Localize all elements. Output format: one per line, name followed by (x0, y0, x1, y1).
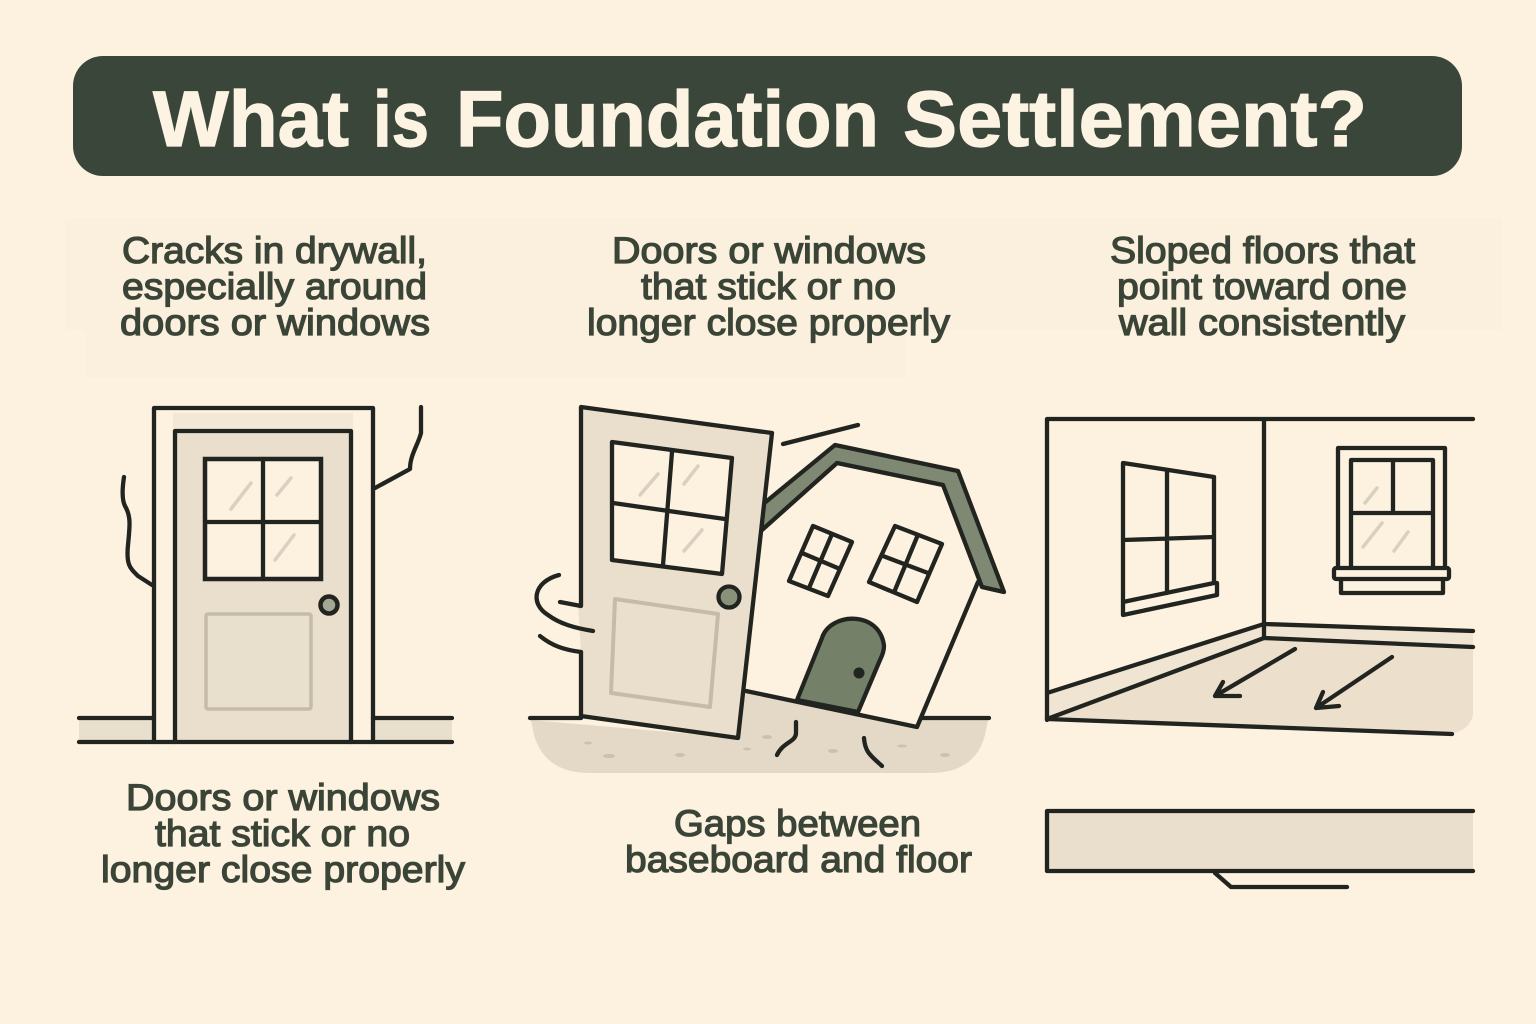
text: cracks in drywall (120, 230, 430, 343)
illustration: room with sloped floor (1047, 419, 1473, 734)
title: What (153, 74, 349, 163)
left wall window (1123, 463, 1217, 615)
text: cracks in drywall: especially around (122, 266, 427, 307)
text: sloped floors: Sloped floors that (1110, 230, 1416, 271)
text: doors or windows stick (bottom) (101, 777, 466, 890)
text: doors or windows stick (top) (587, 230, 951, 343)
text: gaps between baseboard and floor (625, 803, 972, 880)
right wall window (1334, 448, 1449, 593)
text: gaps between baseboard and floor: Gaps between (674, 803, 921, 844)
text: doors or windows stick (top): longer close properly (587, 302, 951, 343)
illustration: tilted door and sinking house (530, 407, 1004, 773)
title (153, 74, 1367, 163)
illustration: door with drywall cracks (79, 407, 452, 742)
text: doors or windows stick (bottom): Doors or windows (126, 777, 440, 818)
title banner (73, 56, 1462, 176)
title: Settlement? (903, 74, 1367, 163)
text: sloped floors: wall consistently (1118, 302, 1406, 343)
title: is (373, 74, 429, 163)
text: doors or windows stick (top): Doors or windows (612, 230, 926, 271)
text: sloped floors: point toward one (1117, 266, 1407, 307)
text: sloped floors (1110, 230, 1416, 343)
text: doors or windows stick (bottom): longer close properly (101, 849, 466, 890)
text: cracks in drywall: doors or windows (120, 302, 430, 343)
text: gaps between baseboard and floor: baseboard and floor (625, 839, 972, 880)
title: Foundation (456, 74, 879, 163)
text: doors or windows stick (top): that stick or no (641, 266, 896, 307)
illustration: baseboard gap (1047, 811, 1473, 887)
text: cracks in drywall: Cracks in drywall, (122, 230, 427, 271)
text: doors or windows stick (bottom): that stick or no (155, 813, 410, 854)
slope arrows (1215, 649, 1392, 708)
